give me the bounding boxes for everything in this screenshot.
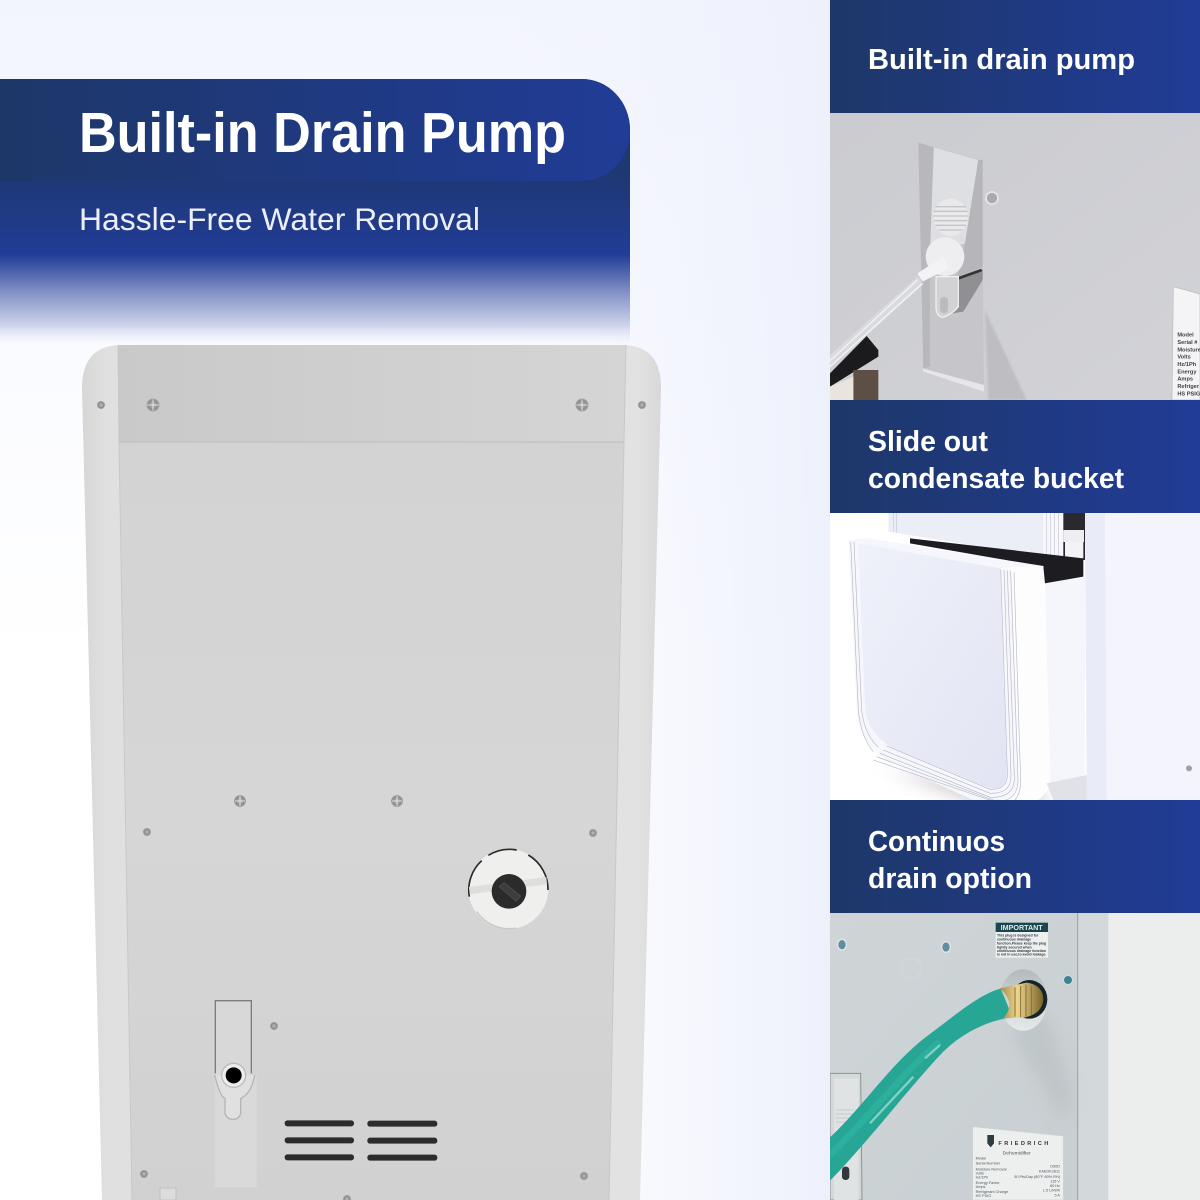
rating label: 1.5 L/kWh: [1043, 1188, 1060, 1192]
photo: pump outlet close-up: Refriger: [1177, 384, 1200, 390]
panel heading: [868, 426, 1124, 495]
photo: pump outlet close-up: Volts: [1177, 355, 1191, 361]
rating label: Hz/1Ph: [976, 1176, 988, 1180]
important label: function.Please keep the plug: [997, 941, 1046, 945]
photo: pump outlet close-up: Model: [1177, 333, 1194, 339]
rating label: 115 V: [1050, 1180, 1060, 1184]
rating label: KAEDK2811: [1039, 1169, 1060, 1173]
rating label: 5 A: [1054, 1194, 1060, 1198]
vent slots: [285, 1120, 437, 1161]
photo: pump outlet close-up: [830, 113, 1200, 400]
panel: built-in drain pump: [830, 0, 1200, 400]
drain plug: [468, 849, 548, 929]
title pill: [0, 79, 630, 181]
important label: is not in use,to avoid leakage.: [997, 953, 1046, 957]
panel header: [830, 400, 1200, 513]
rating label: 50 Pts/Day (80°F 60% RH): [1014, 1175, 1061, 1179]
lower details: [215, 849, 548, 1187]
brass fitting: [1000, 983, 1043, 1018]
top band: [118, 345, 626, 442]
panel: continuous drain option: [830, 800, 1200, 1200]
product: dehumidifier rear view: [82, 345, 661, 1200]
photo: bucket: [830, 513, 1200, 805]
centre panel: [118, 345, 626, 1200]
title: Built-in Drain Pump: [79, 101, 566, 164]
important label: continuous drainage: [997, 937, 1031, 941]
drain port: [1018, 1020, 1068, 1106]
panel: slide out condensate bucket: [830, 400, 1200, 805]
rating label: Energy Factor: [976, 1181, 1000, 1185]
rating label: Model: [976, 1157, 986, 1161]
rating label: FRIEDRICH: [998, 1141, 1048, 1147]
rating label: Serial Number: [976, 1162, 1001, 1166]
panel heading: condensate bucket: [868, 463, 1124, 495]
rating label: Refrigerant Charge: [976, 1190, 1008, 1194]
rating label: HS PSIG: [976, 1194, 991, 1198]
important label: [996, 923, 1048, 958]
panel header: [830, 0, 1200, 113]
rating label: Dehumidifier: [1003, 1151, 1031, 1157]
subtitle: Hassle-Free Water Removal: [79, 201, 480, 237]
important label: continuous drainage function: [997, 949, 1046, 953]
panel header: [830, 800, 1200, 913]
pump outlet slot: [215, 1000, 257, 1187]
photo: pump outlet close-up: Amps: [1177, 377, 1193, 383]
photo: pump outlet close-up: Serial #: [1177, 340, 1198, 346]
header banner: [0, 79, 630, 344]
rating label: 60 Hz: [1050, 1184, 1060, 1188]
rating label: Volts: [976, 1172, 984, 1176]
important label: This plug is designed for: [997, 933, 1039, 937]
important label: IMPORTANT: [1001, 925, 1043, 932]
panel heading: drain option: [868, 863, 1032, 895]
panel heading: Built-in drain pump: [868, 44, 1135, 76]
panel heading: Slide out: [868, 426, 988, 458]
photo: pump outlet close-up: Energy: [1177, 369, 1197, 375]
photo: hose connection: [830, 913, 1200, 1200]
screws: [838, 939, 1072, 984]
rating label: Amps: [976, 1185, 986, 1189]
panel heading: [868, 826, 1032, 895]
cabinet: [82, 345, 661, 1200]
rating label: [973, 1127, 1063, 1200]
screws: [97, 398, 646, 1200]
rating label: D50D: [1050, 1164, 1060, 1168]
important label: tightly secured when: [997, 945, 1032, 949]
photo: pump outlet close-up: Hz/1Ph: [1177, 362, 1197, 368]
hose: [830, 989, 1013, 1181]
panel heading: Continuos: [868, 826, 1005, 858]
photo: pump outlet close-up: HS PSIG: [1177, 391, 1200, 397]
rating label: Moisture Removal: [976, 1168, 1007, 1172]
slot: [830, 1073, 862, 1200]
